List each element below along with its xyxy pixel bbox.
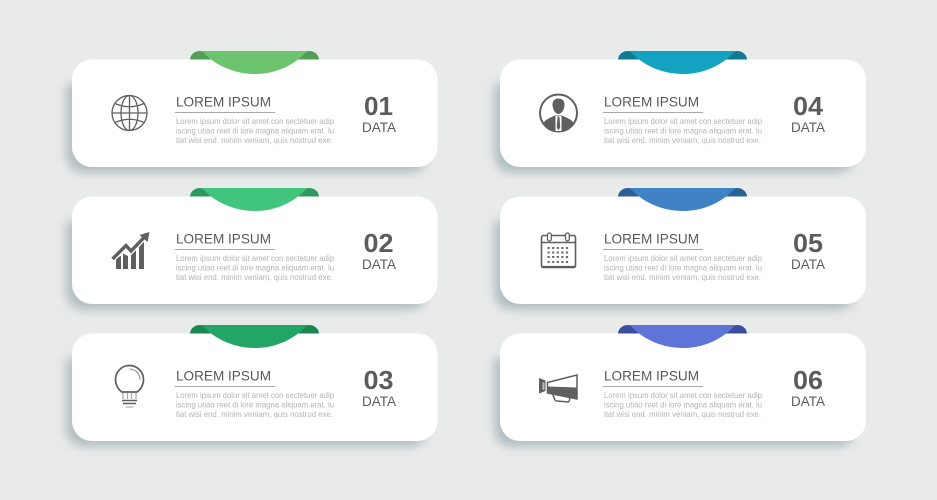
number: 05: 05: [793, 228, 823, 258]
icon: growth chart: [112, 232, 150, 269]
heading: card 03: LOREM IPSUM: [176, 368, 271, 384]
text block: card 02: [176, 254, 335, 282]
icon: businessman: [540, 94, 577, 132]
number: 03: 03: [364, 365, 394, 395]
tab: card 01 green: [190, 51, 319, 74]
label: DATA 01: DATA: [362, 119, 397, 135]
text block: card 05: iscing utiao reet di lore magna aliquam erat. lu: [604, 264, 762, 272]
text block: card 04: [604, 117, 763, 145]
text block: card 03: tiat wisi end. minim veniam, quis nostrud exe.: [176, 410, 333, 419]
panel: card 03: [66, 325, 438, 447]
text block: card 01: iscing utiao reet di lore magna aliquam erat. lu: [176, 126, 334, 136]
icon: globe: [112, 96, 147, 130]
panel: card 06: [494, 325, 866, 447]
text block: card 05: [604, 254, 763, 282]
panel: card 05: [494, 188, 866, 310]
text block: card 05: Lorem ipsum dolor sit amet con sectetuer adip: [604, 254, 763, 263]
number: 02: 02: [364, 228, 394, 258]
label: DATA 03: DATA: [362, 393, 397, 409]
text block: card 02: tiat wisi end. minim veniam, quis nostrud exe.: [176, 273, 333, 282]
tab: card 05 blue: [618, 188, 747, 211]
label: DATA 02: DATA: [362, 256, 397, 272]
text block: card 03: iscing utiao reet di lore magna aliquam erat. lu: [176, 400, 334, 410]
number: 01: 01: [364, 91, 393, 121]
heading: card 06: LOREM IPSUM: [604, 368, 699, 384]
text block: card 06: tiat wisi end. minim veniam, quis nostrud exe.: [604, 410, 761, 419]
text block: card 01: [176, 117, 335, 145]
text block: card 03: [176, 391, 335, 419]
heading: card 05: LOREM IPSUM: [604, 230, 699, 246]
text block: card 04: tiat wisi end. minim veniam, quis nostrud exe.: [604, 136, 761, 145]
text block: card 06: [604, 391, 763, 419]
number: 04: 04: [793, 91, 824, 121]
text block: card 02: iscing utiao reet di lore magna aliquam erat. lu: [176, 264, 334, 272]
text block: card 06: iscing utiao reet di lore magna aliquam erat. lu: [604, 400, 762, 410]
icon: calendar: [542, 233, 576, 268]
text block: card 01: Lorem ipsum dolor sit amet con sectetuer adip: [176, 117, 335, 126]
text block: card 06: Lorem ipsum dolor sit amet con sectetuer adip: [604, 391, 763, 400]
panel: card 02: [66, 188, 438, 310]
number: 06: 06: [793, 365, 823, 395]
icon: light bulb: [116, 366, 144, 407]
tab: card 06 indigo: [618, 325, 747, 348]
label: DATA 04: DATA: [791, 119, 826, 135]
text block: card 01: tiat wisi end. minim veniam, quis nostrud exe.: [176, 136, 333, 145]
label: DATA 05: DATA: [791, 256, 826, 272]
label: DATA 06: DATA: [791, 393, 826, 409]
heading: card 01: LOREM IPSUM: [176, 94, 271, 110]
heading: card 02: LOREM IPSUM: [176, 230, 271, 246]
panel: card 01: [66, 51, 438, 173]
tab: card 03 green: [190, 325, 319, 348]
panel: card 04: [494, 51, 866, 173]
tab: card 04 teal: [618, 51, 747, 74]
icon: megaphone: [539, 375, 577, 402]
text block: card 02: Lorem ipsum dolor sit amet con sectetuer adip: [176, 254, 335, 263]
tab: card 02 green: [190, 188, 319, 211]
text block: card 04: Lorem ipsum dolor sit amet con sectetuer adip: [604, 117, 763, 126]
text block: card 03: Lorem ipsum dolor sit amet con sectetuer adip: [176, 391, 335, 400]
heading: card 04: LOREM IPSUM: [604, 94, 699, 110]
text block: card 04: iscing utiao reet di lore magna aliquam erat. lu: [604, 126, 762, 136]
text block: card 05: tiat wisi end. minim veniam, quis nostrud exe.: [604, 273, 761, 282]
